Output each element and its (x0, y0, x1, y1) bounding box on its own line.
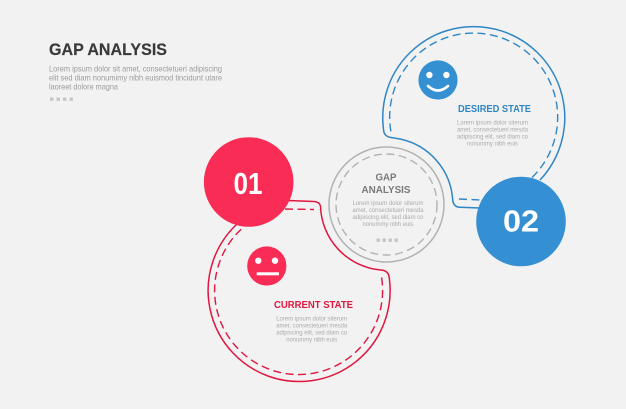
number badge 01: 01 (234, 166, 262, 201)
intro text: laoreet dolore magna (49, 82, 118, 92)
gap analysis text: amet, consectetueri mesda (352, 207, 424, 214)
icon: neutral face (247, 246, 286, 286)
icon: happy face (418, 60, 458, 100)
heading: gap analysis (362, 172, 410, 196)
gap analysis text (352, 200, 424, 228)
panel: gap analysis (329, 147, 444, 262)
heading: current state: CURRENT STATE (274, 300, 353, 311)
gap analysis text: Lorem ipsum dolor siterum (352, 200, 424, 207)
red dashed outline (215, 229, 383, 375)
pagination dots (376, 238, 398, 242)
desired state text: adipiscing elit, sed diam co (457, 134, 528, 140)
intro text: Lorem ipsum dolor sit amet, consectetueri adipiscing (49, 64, 222, 74)
red dashed top segment (285, 208, 314, 210)
current state text: amet, consectetueri mesda (276, 322, 348, 330)
desired state text (457, 120, 528, 148)
current state text: adipiscing elit, sed diam co (276, 330, 348, 336)
current state text: nonummy nibh euis (286, 337, 337, 344)
desired state text: nonummy nibh euis (467, 141, 518, 148)
gap analysis text: adipiscing elit, sed diam co (352, 214, 424, 221)
desired state text: amet, consectetueri mesda (457, 126, 528, 134)
title: GAP ANALYSIS (49, 40, 167, 59)
blue outline (383, 27, 565, 208)
current state text (276, 316, 348, 344)
number badge 02 (476, 177, 566, 266)
header block (49, 40, 222, 101)
panel: desired state (383, 27, 566, 266)
gray outer ring (329, 147, 444, 262)
blue dashed bottom segment (459, 199, 480, 200)
blue dashed outline (390, 33, 558, 177)
number badge 01 (204, 137, 294, 227)
heading: gap analysis: GAP (376, 172, 396, 184)
current state text: Lorem ipsum dolor siterum (276, 316, 347, 322)
panel: current state (204, 137, 390, 382)
intro text (49, 64, 222, 92)
heading: gap analysis: ANALYSIS (362, 184, 410, 196)
heading: desired state: DESIRED STATE (458, 104, 531, 115)
desired state text: Lorem ipsum dolor siterum (457, 120, 528, 126)
pagination dots (50, 98, 73, 101)
gap analysis text: nonummy nibh euis (362, 221, 414, 228)
gray dashed ring (336, 154, 437, 255)
number badge 02: 02 (503, 204, 539, 239)
intro text: elit sed diam nonumimy nibh euismod tincidunt utare (49, 74, 222, 82)
red outline (208, 200, 390, 382)
